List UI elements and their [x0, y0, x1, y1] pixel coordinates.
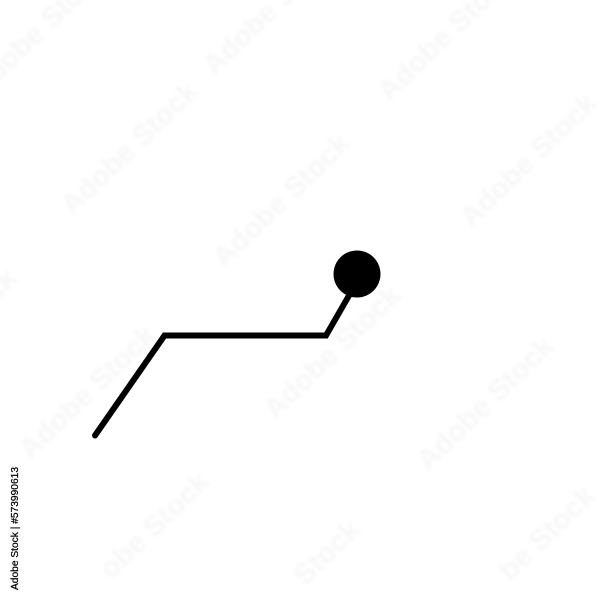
watermark pattern: be Stock — [493, 479, 600, 587]
watermark pattern: Adobe Stock — [207, 127, 357, 274]
watermark pattern: Adobe Stock — [13, 319, 163, 466]
stock image credit: Adobe Stock | #573990613 — [9, 467, 21, 590]
watermark pattern: Adobe Stock — [411, 330, 561, 477]
line chart icon: polyline ending in a dot — [95, 250, 380, 436]
watermark pattern: Stock — [288, 513, 367, 592]
icon line segments — [95, 292, 351, 436]
watermark pattern: Adobe Stock — [454, 87, 600, 234]
watermark pattern: Adobe Stock — [55, 75, 205, 222]
watermark pattern: obe Stock — [94, 465, 216, 585]
watermark pattern: Adobe Stock — [258, 279, 408, 426]
icon end dot — [334, 250, 380, 298]
